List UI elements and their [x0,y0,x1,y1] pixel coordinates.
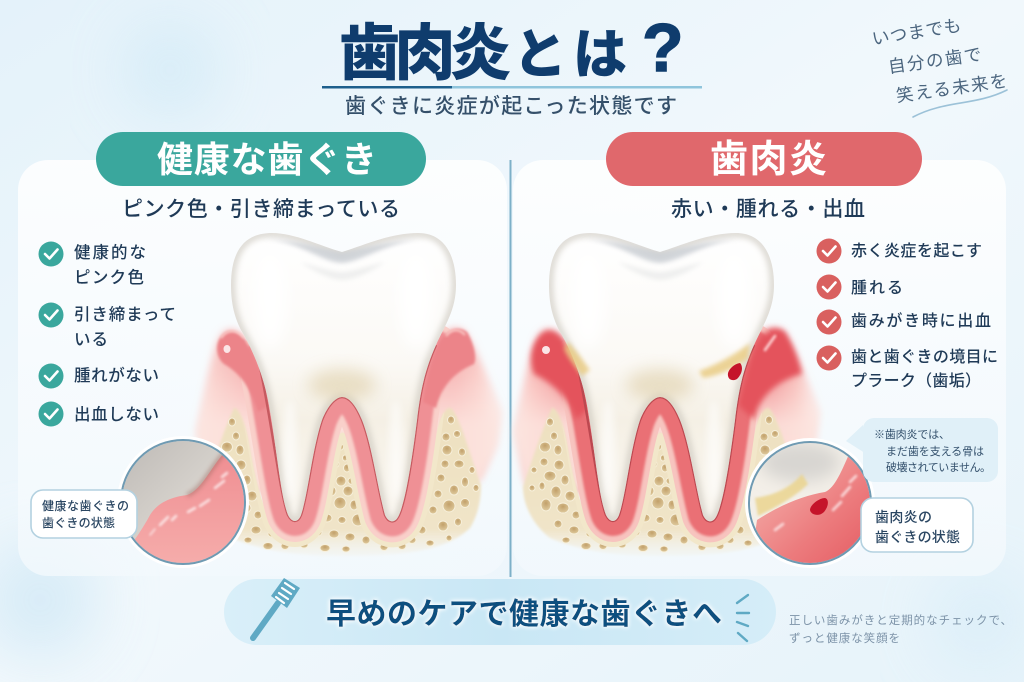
footnote [789,613,1012,645]
tooth illustration: gingivitis [514,233,820,556]
callout: bone note: ※歯肉炎では、 [874,428,950,441]
checklist: gingivitis: 歯と歯ぐきの境目に [851,348,998,366]
subheading: gingivitis: 赤い・腫れる・出血 [671,198,865,221]
checklist: gingivitis [816,238,998,390]
callout: bone note: まだ歯を支える骨は [886,445,984,458]
panel: healthy [18,160,507,576]
callout: healthy gum label: 健康な歯ぐきの [42,498,129,513]
checklist: healthy: ピンク色 [74,268,144,287]
tooth illustration: healthy [196,233,502,556]
divider [510,160,512,577]
checklist: healthy: 腫れがない [74,365,159,385]
footnote: 正しい歯みがきと定期的なチェックで、 [789,613,1012,627]
title: とは [513,25,627,85]
subheading: healthy: ピンク色・引き締まっている [122,198,400,221]
plaque [564,342,750,378]
panel: gingivitis [513,160,1006,576]
checklist: healthy: 健康的な [74,243,146,262]
checklist: gingivitis: 歯みがき時に出血 [851,311,991,330]
checklist: gingivitis: 腫れる [851,279,903,297]
callout: gingivitis gum label: 歯ぐきの状態 [875,529,960,545]
icon: sparkle rays [737,595,749,641]
magnifier: inflamed gum [745,438,875,570]
heading pill: healthy: 健康な歯ぐき [157,139,377,180]
banner text: 早めのケアで健康な歯ぐきへ [326,598,722,631]
heading pill: gingivitis [606,132,922,186]
callout: gingivitis gum label [861,498,973,552]
heading pill: gingivitis: 歯肉炎 [710,139,827,181]
title [339,10,684,87]
callout: bone note: 破壊されていません。 [886,460,991,474]
checklist: gingivitis: プラーク（歯垢） [851,372,981,390]
heading pill: healthy [96,132,426,186]
footnote: ずっと健康な笑顔を [789,631,900,645]
title underline [322,86,702,88]
blood drop [728,363,742,380]
subtitle: 歯ぐきに炎症が起こった状態です [345,95,677,118]
handwritten note: 笑える未来を [895,71,1008,106]
checklist: healthy: 引き締まって [74,305,176,324]
callout: bone note [846,418,998,482]
callout: healthy gum label [31,490,137,538]
title: 歯肉炎 [339,19,511,87]
handwritten note [870,15,1008,117]
handwritten note: 自分の歯で [887,44,983,77]
title: ? [642,10,684,86]
checklist: healthy [38,242,176,426]
callout: healthy gum label: 歯ぐきの状態 [42,515,115,530]
checklist: healthy: 出血しない [74,405,159,424]
checklist: gingivitis: 赤く炎症を起こす [851,242,982,260]
checklist: healthy: いる [74,331,108,349]
icon: toothbrush [253,578,300,638]
handwritten note: いつまでも [870,15,963,49]
callout: gingivitis gum label: 歯肉炎の [875,509,932,525]
banner [224,579,776,645]
magnifier: healthy gum [117,436,250,570]
